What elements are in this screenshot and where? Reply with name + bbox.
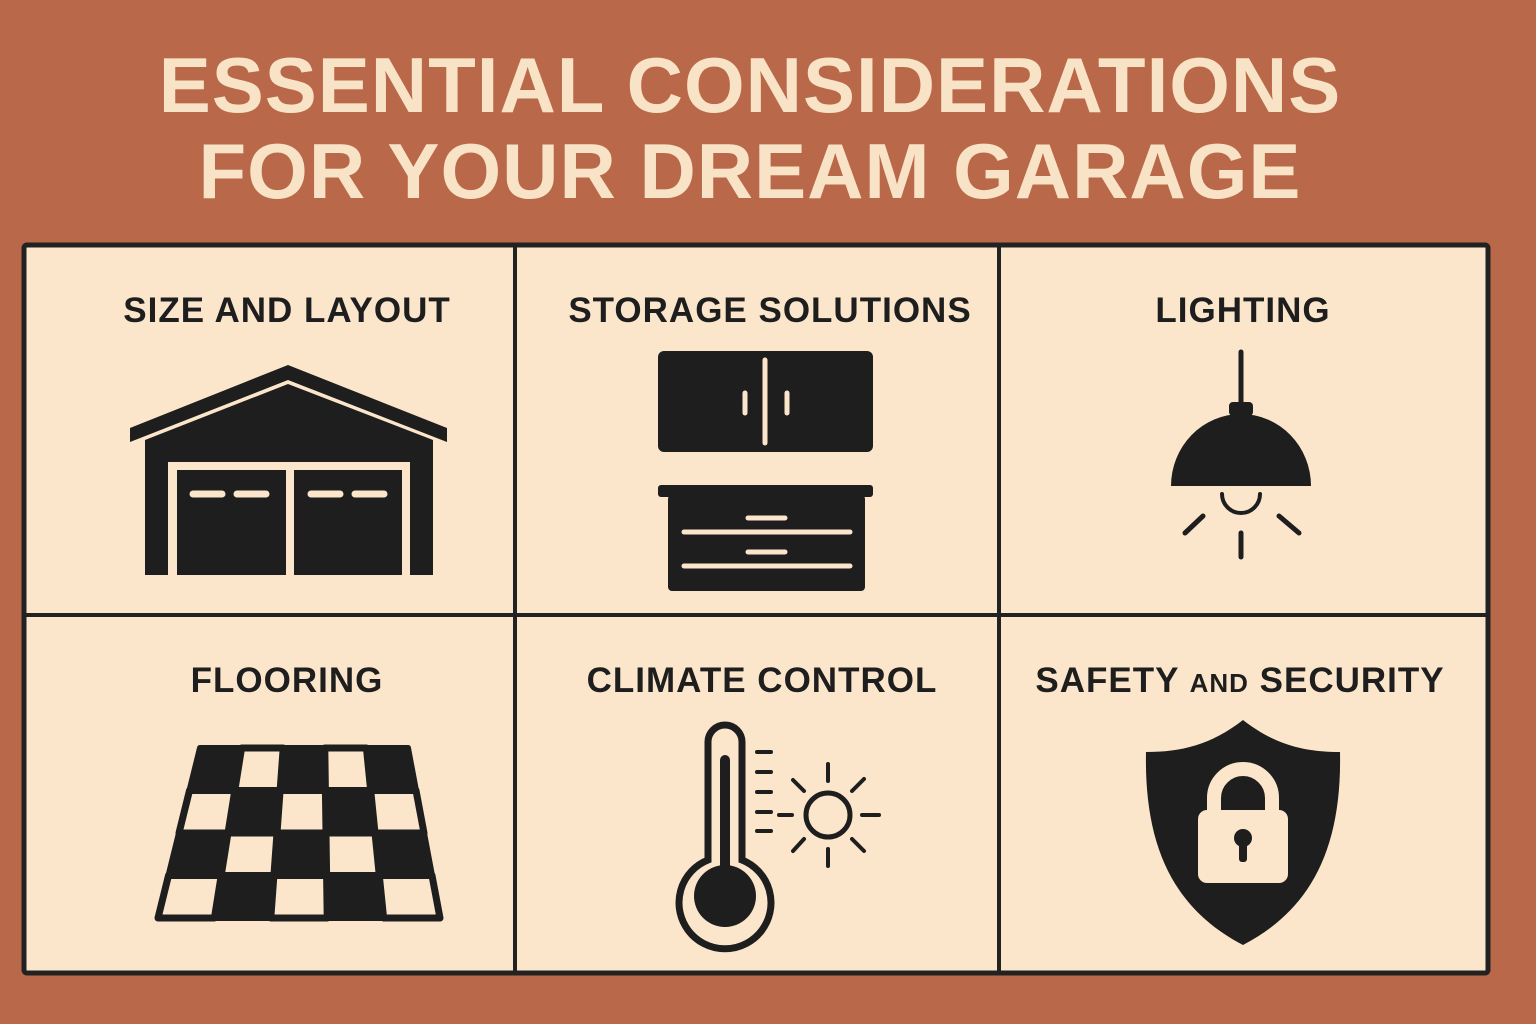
- icon: garage: [130, 365, 447, 575]
- icon: checkered floor: [158, 748, 440, 918]
- panel: flooring: [158, 661, 440, 918]
- title: ESSENTIAL CONSIDERATIONS: [159, 41, 1341, 129]
- heading: flooring: FLOORING: [191, 661, 383, 700]
- heading: safety and security: SAFETY AND SECURITY: [1035, 661, 1445, 700]
- title: [159, 41, 1341, 215]
- heading: size and layout: SIZE AND LAYOUT: [123, 291, 451, 330]
- panel: storage solutions: [568, 291, 972, 591]
- icon: thermometer and sun: [679, 725, 879, 949]
- heading: lighting: LIGHTING: [1155, 291, 1331, 330]
- panel: safety and security: [1035, 661, 1445, 945]
- icon: pendant lamp: [1171, 352, 1311, 557]
- panel: size and layout: [123, 291, 451, 575]
- panel: climate control: [587, 661, 937, 949]
- icon: shield with lock: [1146, 720, 1340, 945]
- icon: cabinets: [658, 351, 873, 591]
- title: FOR YOUR DREAM GARAGE: [199, 127, 1301, 215]
- heading: storage solutions: STORAGE SOLUTIONS: [568, 291, 972, 330]
- panel: lighting: [1155, 291, 1331, 557]
- heading: climate control: CLIMATE CONTROL: [587, 661, 937, 700]
